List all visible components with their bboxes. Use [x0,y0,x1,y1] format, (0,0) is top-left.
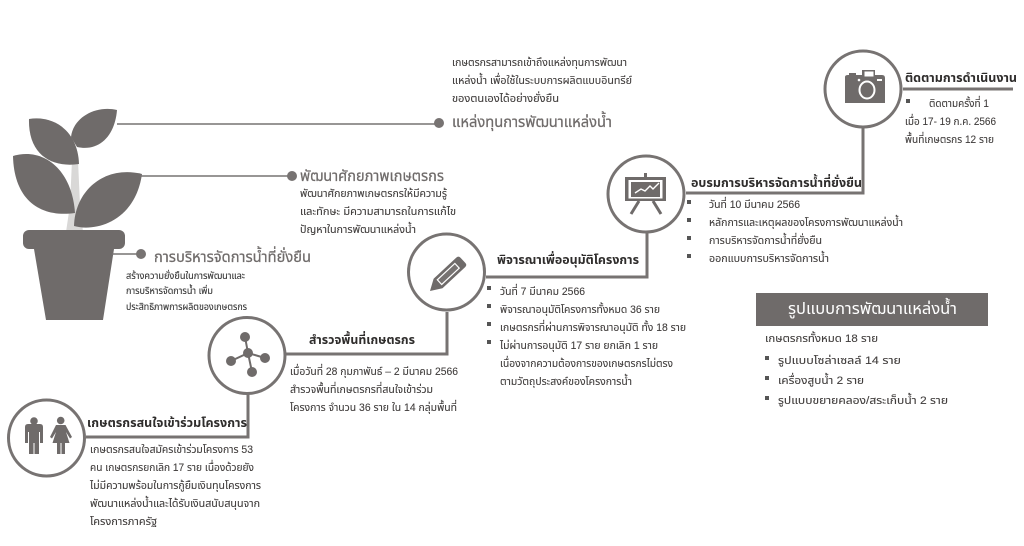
step 2 text: farm survey [290,331,458,414]
panel: water development models [756,293,988,407]
step 1 text: interested farmers: เกษตรกรสนใจเข้าร่วมโครงการ [87,416,248,430]
step 3 text: project approval: ไม่ผ่านการอนุมัติ 17 ราย ยกเลิก 1 ราย [499,339,658,352]
text block: water source fund: ของตนเองได้อย่างยั่งยืน [452,91,559,105]
step 2 circle: network icon [209,318,285,394]
panel: water development models: รูปแบบขยายคลอง/สระเก็บน้ำ 2 ราย [778,392,948,407]
step 1 text: interested farmers: คน เกษตรกรยกเลิก 17 ราย เนื่องด้วยยัง [90,459,254,474]
step 4 text: sustainable water training [687,174,903,265]
panel: water development models: เกษตรกรทั้งหมด 18 ราย [765,331,878,345]
step 2 text: farm survey: โครงการ จำนวน 36 ราย ใน 14 กลุ่มพื้นที่ [290,399,457,414]
text block: farmer capacity [300,168,456,236]
step 5 text: follow-up: ติดตามการดำเนินงาน [905,71,1017,85]
step 1 text: interested farmers: โครงการภาครัฐ [90,516,157,528]
text block: sustainable water management: การบริหารจัดการน้ำที่ยั่งยืน [154,246,311,266]
connector: plant to farmer capacity [140,171,297,181]
text block: water source fund: แหล่งน้ำ เพื่อใช้ในระบบการผลิตแบบอินทรีย์ [452,72,632,87]
text block: water source fund: แหล่งทุนการพัฒนาแหล่งน้ำ [452,111,612,131]
step 1 text: interested farmers: พัฒนาแหล่งน้ำและได้รับเงินสนับสนุนจาก [90,495,260,510]
plant illustration [13,109,142,320]
step 3 text: project approval: พิจารณาเพื่ออนุมัติโครงการ [497,251,640,267]
step 2 text: farm survey: สำรวจพื้นที่เกษตรกร [309,331,416,347]
step 1 text: interested farmers: ไม่มีความพร้อมในการกู้ยืมเงินทุนโครงการ [89,479,261,492]
step 1 circle: people icon [8,400,84,476]
text block: water source fund [452,56,632,131]
step 5 text: follow-up [905,71,1017,146]
step 1 text: interested farmers: เกษตรกรสนใจสมัครเข้าร่วมโครงการ 53 [90,443,253,456]
panel: water development models: รูปแบบการพัฒนาแหล่งน้ำ [788,297,957,318]
text block: farmer capacity: พัฒนาศักยภาพเกษตรกรให้มีความรู้ [300,188,448,200]
step 3 text: project approval [487,251,686,388]
step 3 text: project approval: เกษตรกรที่ผ่านการพิจารณาอนุมัติ ทั้ง 18 ราย [500,319,686,334]
text block: farmer capacity: พัฒนาศักยภาพเกษตรกร [300,168,444,185]
step 4 text: sustainable water training: วันที่ 10 มีนาคม 2566 [709,196,800,211]
connector: pot to water management [112,249,146,259]
step 4 text: sustainable water training: หลักการและเหตุผลของโครงการพัฒนาแหล่งน้ำ [709,214,903,229]
step 5 text: follow-up: พื้นที่เกษตรกร 12 ราย [905,131,994,146]
step 3 text: project approval: ตามวัตถุประสงค์ของโครงการน้ำ [500,373,632,388]
step 3 text: project approval: พิจารณาอนุมัติโครงการทั้งหมด 36 ราย [500,302,660,316]
step 4 circle: presentation board icon [608,156,684,232]
step 3 text: project approval: เนื่องจากความต้องการของเกษตรกรไม่ตรง [500,355,673,370]
step 2 text: farm survey: สำรวจพื้นที่เกษตรกรที่สนใจเข้าร่วม [290,381,433,396]
text block: sustainable water management: การบริหารจัดการน้ำ เพิ่ม [126,284,213,297]
step 1 text: interested farmers [87,416,261,528]
panel: water development models: เครื่องสูบน้ำ 2 ราย [778,372,864,387]
step 3 text: project approval: วันที่ 7 มีนาคม 2566 [500,283,585,298]
step 4 text: sustainable water training: ออกแบบการบริหารจัดการน้ำ [709,250,829,265]
step 2 text: farm survey: เมื่อวันที่ 28 กุมภาพันธ์ – 2 มีนาคม 2566 [290,363,458,378]
text block: water source fund: เกษตรกรสามารถเข้าถึงแหล่งทุนการพัฒนา [452,56,627,69]
connector: plant to water source fund [117,118,444,128]
step 3 circle: pencil icon [408,234,484,310]
step 4 text: sustainable water training: อบรมการบริหารจัดการน้ำที่ยั่งยืน [691,174,862,190]
step 5 text: follow-up: เมื่อ 17- 19 ก.ค. 2566 [905,113,996,128]
text block: sustainable water management [126,246,311,313]
panel: water development models: รูปแบบโซล่าเซลล์ 14 ราย [778,354,901,367]
text block: farmer capacity: และทักษะ มีความสามารถในการแก้ไข [300,206,456,218]
text block: sustainable water management: สร้างความยั่งยืนในการพัฒนาและ [126,270,245,282]
step 4 text: sustainable water training: การบริหารจัดการน้ำที่ยั่งยืน [709,232,822,247]
timeline connector path [86,89,1013,437]
step 5 text: follow-up: ติดตามครั้งที่ 1 [929,95,989,110]
text block: farmer capacity: ปัญหาในการพัฒนาแหล่งน้ำ [300,221,416,236]
text block: sustainable water management: ประสิทธิภาพการผลิตของเกษตรกร [126,302,247,313]
step 5 circle: camera icon [825,51,901,127]
